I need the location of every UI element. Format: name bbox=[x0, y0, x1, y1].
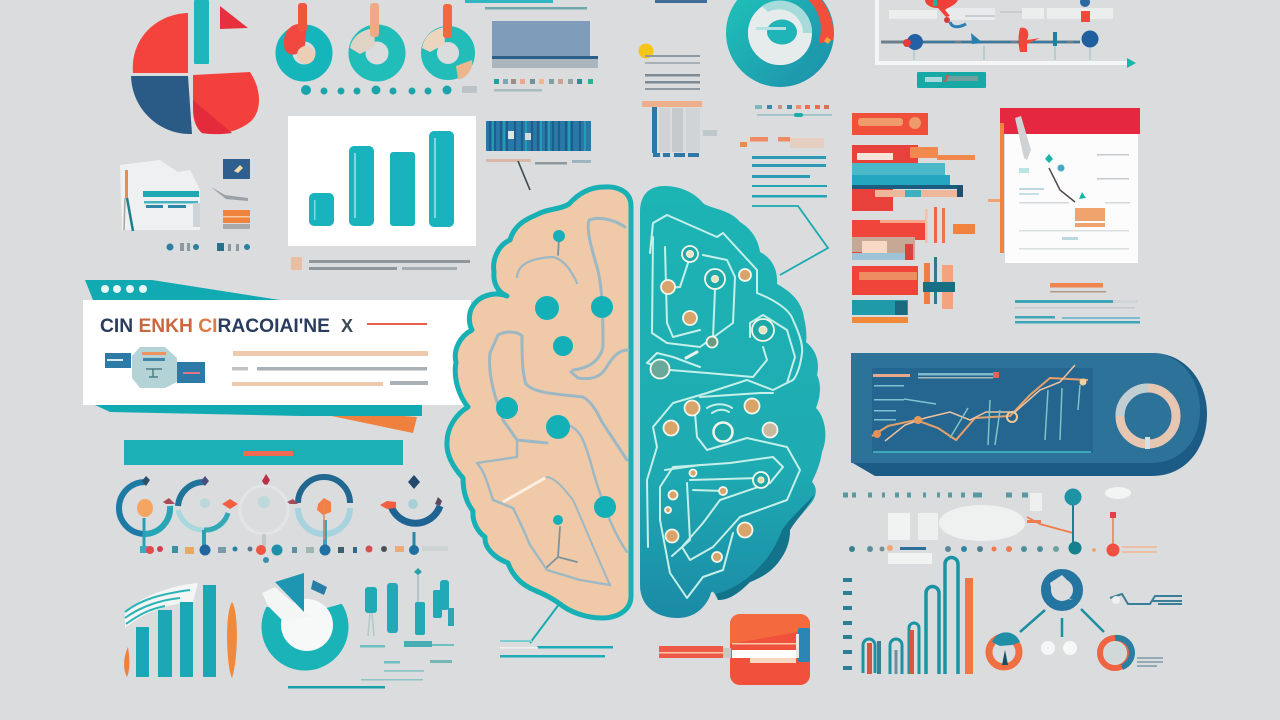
left hemisphere outline bbox=[447, 187, 631, 618]
red accent line bbox=[367, 323, 427, 325]
teal banner bbox=[124, 440, 403, 465]
dot row lower bbox=[849, 545, 1096, 552]
card title: CIN ENKH CIRACOIAI'NE bbox=[100, 316, 330, 337]
dot row under donuts bbox=[301, 85, 477, 95]
small icon row bbox=[166, 243, 250, 251]
top-right timeline chart bbox=[877, 0, 1136, 68]
blue rectangle card bbox=[492, 21, 598, 68]
barcode chart bbox=[486, 121, 591, 190]
stacked horizontal bars bbox=[852, 113, 975, 323]
network of rings bbox=[989, 574, 1182, 668]
legend under bar chart bbox=[291, 257, 470, 270]
darker lower edge bbox=[716, 494, 815, 600]
teal base strip bbox=[95, 405, 422, 416]
ring timeline bbox=[119, 474, 442, 548]
large teal ring with red arc bbox=[737, 0, 833, 87]
left hemisphere highlight stroke bbox=[503, 478, 545, 502]
connector below brain bbox=[500, 603, 613, 658]
brain: right hemisphere bbox=[640, 186, 825, 618]
orange ribbon bbox=[293, 408, 417, 433]
white bar chart panel bbox=[288, 116, 476, 246]
left hemisphere nodes bbox=[496, 230, 616, 525]
teal tab bbox=[85, 280, 280, 300]
bottom left bar chart bbox=[124, 583, 237, 678]
card: heading panel bbox=[83, 280, 471, 433]
brain: left hemisphere bbox=[447, 187, 631, 618]
arch bar chart bbox=[843, 558, 973, 674]
teal button bbox=[917, 72, 986, 88]
pie chart: quadrants bbox=[131, 0, 259, 134]
right hemisphere nodes bbox=[650, 246, 778, 562]
right hemisphere fill bbox=[640, 186, 825, 618]
small marker row bbox=[494, 79, 593, 92]
donut trio with pins bbox=[284, 3, 472, 79]
left hemisphere pathways bbox=[477, 218, 628, 585]
connector line to right hemisphere bbox=[752, 185, 828, 275]
small column chart bbox=[288, 568, 454, 688]
table chart with yellow marker bbox=[638, 44, 717, 157]
dotted label row with pins bbox=[843, 487, 1157, 564]
red device with cable bbox=[659, 614, 810, 685]
bottom pie ring bbox=[258, 573, 352, 660]
card close mark: X bbox=[341, 316, 353, 336]
card text lines bbox=[232, 351, 428, 386]
small tiles and brush bbox=[211, 159, 250, 229]
top strip lines bbox=[465, 0, 707, 10]
small house diagram bbox=[120, 160, 200, 231]
blue dashboard panel bbox=[851, 353, 1207, 476]
white card bbox=[83, 300, 471, 405]
document panel with red header bbox=[988, 108, 1140, 263]
right hemisphere circuits bbox=[647, 215, 802, 598]
mini list beside brain bbox=[740, 105, 832, 178]
timeline dots bbox=[140, 544, 448, 563]
card icon bbox=[105, 347, 205, 388]
bottom right mini lines bbox=[1015, 283, 1140, 324]
